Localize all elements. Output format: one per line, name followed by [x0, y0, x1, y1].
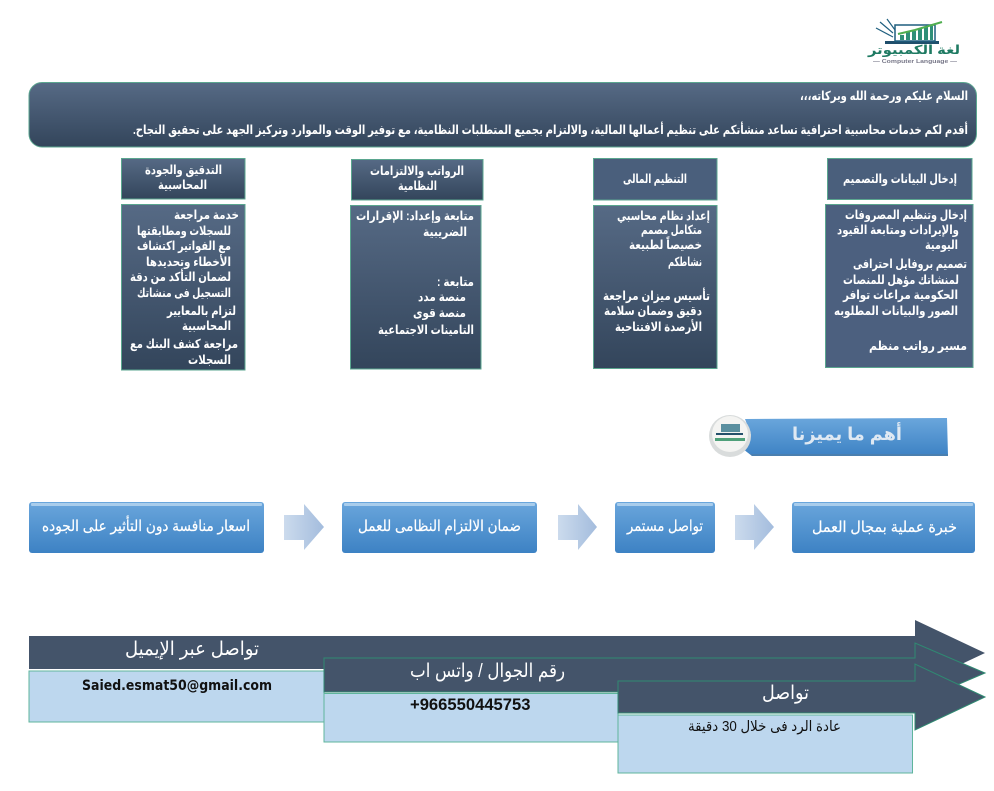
list: payroll: التامينات الاجتماعية: [378, 323, 474, 337]
feature box: competitive prices: اسعار منافسة دون التأثير على الجوده: [42, 515, 250, 535]
list: data entry: والإيرادات ومتابعة القيود: [837, 223, 959, 237]
feature box: practical experience: [792, 502, 975, 553]
list: financial organization: خصيصاً لطبيعة: [629, 235, 702, 252]
panel: audit and quality: [122, 158, 245, 370]
contact step: email: تواصل عبر الإيميل: [125, 639, 259, 660]
list: audit: لضمان التأكد من دقة: [130, 268, 231, 284]
list: audit: [130, 208, 239, 367]
list: data entry: لمنشاتك مؤهل للمنصات: [843, 273, 959, 287]
list: financial organization: تأسيس ميزان مراجعة: [603, 287, 710, 303]
list: financial organization: دقيق وضمان سلامة: [604, 304, 702, 318]
list: audit: للسجلات ومطابقتها: [137, 224, 231, 238]
contact step: response time: عادة الرد فى خلال 30 دقيقة: [688, 719, 841, 735]
heading: payroll: الرواتب والالتزامات: [370, 164, 464, 178]
list: financial organization: [603, 209, 710, 334]
list: payroll: الضريبية: [423, 225, 467, 239]
panel: payroll and obligations: [350, 160, 483, 369]
heading: audit: التدقيق والجودة: [145, 163, 222, 177]
list: data entry: مسير رواتب منظم: [869, 339, 967, 353]
list: payroll: منصة قوى: [413, 306, 466, 320]
feature box: regulatory compliance: [342, 502, 537, 553]
list: audit: التسجيل فى منشاتك: [137, 286, 231, 300]
feature box: continuous communication: [615, 502, 715, 553]
list: audit: السجلات: [188, 353, 231, 367]
heading: payroll: النظامية: [398, 179, 437, 193]
feature box: continuous communication: تواصل مستمر: [626, 518, 703, 535]
list: financial organization: نشاطكم: [668, 255, 702, 269]
heading: financial organization: التنظيم المالى: [623, 172, 687, 186]
contact step: email: [29, 620, 985, 722]
list: audit: الأخطاء وتحديدها: [146, 254, 231, 269]
list: financial organization: إعداد نظام محاسبي: [617, 209, 710, 224]
contact step: response time: [618, 664, 985, 773]
logo: [867, 19, 960, 65]
list: payroll: متابعة :: [437, 275, 474, 289]
list: data entry: الحكومية مراعات توافر: [842, 288, 958, 302]
list: data entry: الصور والبيانات المطلوبه: [834, 304, 958, 318]
list: payroll: [356, 209, 474, 337]
list: audit: لتزام بالمعايير: [166, 304, 236, 319]
icon: round logo badge: [709, 415, 751, 457]
panel: financial organization: [594, 158, 717, 368]
heading: audit: [145, 163, 222, 192]
feature box: practical experience: خبرة عملية بمجال العمل: [812, 519, 957, 536]
section banner: what distinguishes us: [709, 415, 948, 457]
heading text: أهم ما يميزنا: [792, 422, 902, 445]
list: audit: خدمة مراجعة: [174, 208, 239, 222]
contact step: response time: تواصل: [762, 683, 809, 704]
panel: data entry and design: [826, 158, 973, 368]
list: audit: مع الفواتير اكتشاف: [137, 239, 231, 253]
heading: audit: المحاسبية: [158, 178, 207, 192]
contact step: phone: رقم الجوال / واتس اب: [410, 661, 565, 682]
feature box: regulatory compliance: ضمان الالتزام النظامى للعمل: [358, 518, 521, 535]
contact step: phone: +966550445753: [410, 696, 530, 714]
list: data entry: [834, 208, 967, 353]
arrow: [735, 504, 774, 550]
list: data entry: اليومية: [925, 238, 958, 252]
contact step: phone: [324, 643, 985, 742]
list: audit: المحاسبية: [182, 319, 231, 333]
logo: لغة الكمبيوتر: [867, 43, 960, 57]
feature box: competitive prices: [29, 502, 264, 553]
list: audit: مراجعة كشف البنك مع: [130, 337, 238, 351]
heading: payroll: [370, 164, 464, 193]
list: financial organization: الأرصدة الافتتاحية: [615, 319, 702, 334]
arrow: [558, 504, 597, 550]
logo: — Computer Language —: [873, 59, 958, 65]
list: payroll: منصة مدد: [418, 290, 466, 304]
contact step: email: Saied.esmat50@gmail.com: [82, 678, 272, 694]
panel: greeting: [29, 82, 976, 147]
list: financial organization: متكامل مصمم: [641, 223, 702, 237]
arrow: [284, 504, 324, 550]
list: payroll: متابعة وإعداد: الإقرارات: [356, 209, 474, 223]
heading: data entry: إدخال البيانات والتصميم: [843, 172, 957, 186]
